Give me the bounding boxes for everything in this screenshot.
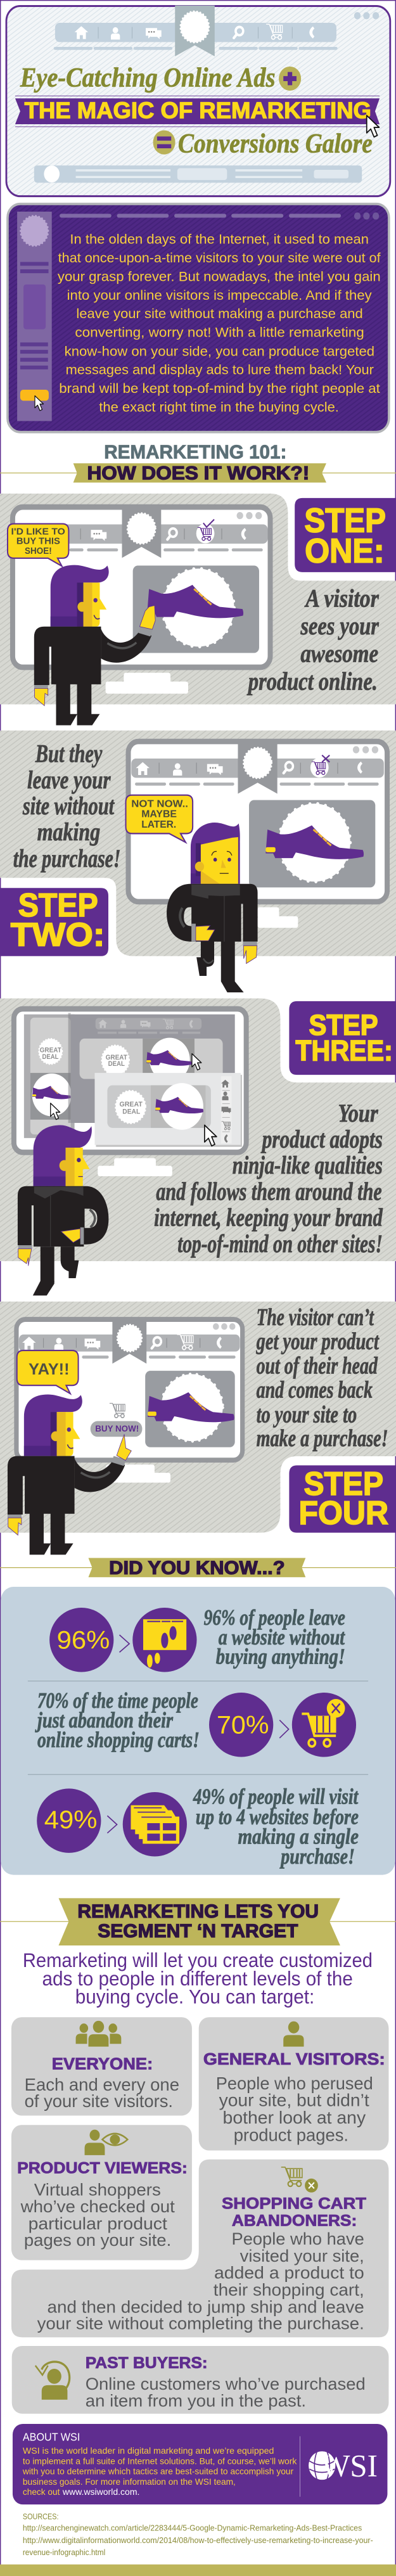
speech bubble: YAY!! [29, 1361, 70, 1378]
title line three: Conversions Galore [178, 129, 373, 159]
card: shopping cart abandoners: SHOPPING CART [222, 2195, 366, 2213]
segment intro text: Remarketing will let you create customized [23, 1950, 373, 1971]
intro text: leave your site without making a purchase and [76, 306, 363, 321]
product ad [145, 1371, 235, 1447]
panel: about WSI: check out [23, 2487, 60, 2497]
footer bar [34, 165, 362, 183]
character: visitor reaching for shoe [34, 565, 155, 725]
ad window: back left: GREAT [40, 1047, 61, 1054]
card: general visitors: GENERAL VISITORS: [203, 2050, 385, 2068]
product viewers text [17, 2160, 188, 2250]
navigation bar [55, 23, 336, 48]
stat: 70%: online shopping carts! [37, 1728, 200, 1752]
stat: 70%: 70% of the time people [37, 1689, 198, 1713]
stat: 49%: 49% [44, 1805, 97, 1834]
step one text: awesome [300, 640, 378, 668]
card: past buyers: Online customers who’ve purchased [86, 2374, 366, 2393]
segment and target banner: REMARKETING LETS YOU [77, 1901, 319, 1922]
plus icon [279, 67, 301, 91]
sources [23, 2511, 373, 2557]
header panel [6, 6, 390, 196]
stat: 49%: purchase! [279, 1845, 355, 1869]
monitor: step four [16, 1319, 243, 1483]
did you know banner: DID YOU KNOW...? [109, 1558, 285, 1579]
product ad [133, 566, 259, 653]
panel: about WSI: business goals. For more information on the WSI team, [23, 2477, 236, 2487]
monitor: step three [14, 1009, 246, 1176]
sources: http://www.digitalinformationworld.com/2014/08/how-to-effectively-use-remarketing-to-increase-your- [23, 2535, 373, 2545]
stat: 70%: just abandon their [35, 1708, 174, 1733]
equals icon [153, 131, 176, 155]
panel: statistics [1, 1587, 395, 1875]
stat: 96%: a website without [219, 1625, 346, 1650]
card: everyone: of your site visitors. [25, 2091, 173, 2111]
sources: SOURCES: [23, 2511, 58, 2522]
card: shopping cart abandoners: your site without completing the purchase. [37, 2314, 364, 2333]
segment and target banner: SEGMENT ‘N TARGET [98, 1921, 298, 1942]
intro text: know-how on your side, you can produce targeted [65, 344, 374, 359]
product viewers text: pages on your site. [24, 2230, 171, 2250]
stat: 96%: 96% of people leave [204, 1606, 345, 1630]
card: general visitors: product pages. [234, 2125, 348, 2145]
cursor [367, 115, 379, 137]
section 5: stats and targeting [0, 1774, 396, 2260]
ad window: front: DEAL [122, 1108, 141, 1115]
ad window: back left: DEAL [42, 1054, 59, 1061]
ad window: front [94, 1073, 242, 1147]
card: general visitors: your site, but didn’t [219, 2091, 369, 2110]
panel: about WSI: to implement a full suite of Internet solutions. But, of course, we’ll work [23, 2456, 297, 2466]
stat: 96%: 96% [57, 1626, 110, 1655]
step one text [246, 585, 380, 696]
product viewers text: PRODUCT VIEWERS: [17, 2160, 188, 2177]
stat: 96%: buying anything! [216, 1644, 345, 1669]
ad window: front: GREAT [120, 1101, 143, 1108]
section 4: step four and did you know [0, 1302, 396, 1875]
step three badge: THREE: [295, 1035, 393, 1067]
panel: step two [0, 731, 396, 956]
section 2: how it works [0, 442, 396, 992]
segment intro text: buying cycle. You can target: [75, 1986, 314, 2008]
speech bubble [126, 795, 193, 842]
step two text [13, 740, 121, 873]
card: shopping cart abandoners: their shopping cart, [214, 2280, 364, 2300]
panel: about WSI: WSI is the world leader in digital marketing and we’re equipped [23, 2446, 274, 2456]
title banner: THE MAGIC OF REMARKETING [25, 98, 371, 124]
speech bubble: NOT NOW.. [131, 798, 188, 809]
intro text: In the olden days of the Internet, it used to mean [70, 232, 369, 247]
step four badge: STEP [304, 1465, 383, 1502]
intro text: into your online visitors is impeccable. And if they [67, 288, 372, 303]
speech bubble [8, 524, 68, 566]
intro text: that once-upon-a-time visitors to your site were out of [58, 250, 381, 266]
heading: REMARKETING 101: [104, 442, 286, 463]
step two badge: STEP [18, 887, 98, 923]
step three text: Your [338, 1099, 379, 1127]
stat: 49%: up to 4 websites before [196, 1805, 359, 1829]
card: past buyers: PAST BUYERS: [86, 2355, 208, 2372]
product viewers text: who’ve checked out [20, 2196, 176, 2216]
section 3: step three [0, 999, 396, 1295]
speech bubble [17, 1350, 79, 1394]
product viewers text: Virtual shoppers [34, 2180, 161, 2200]
step two text: leave your [27, 766, 111, 794]
panel: step three [0, 999, 396, 1261]
stat: 70% [35, 1689, 356, 1757]
stat: 49% [37, 1785, 359, 1869]
step four badge: FOUR [299, 1494, 388, 1532]
panel: about WSI: www.wsiworld.com. [62, 2487, 139, 2497]
buy now button: BUY NOW! [95, 1424, 139, 1433]
title line one: Eye-Catching Online Ads [20, 63, 275, 93]
speech bubble: SHOE! [25, 546, 52, 556]
card: shopping cart abandoners: added a product to [214, 2263, 364, 2283]
ad window: middle [68, 1013, 235, 1123]
product viewers text: particular product [29, 2214, 168, 2233]
step one badge: STEP [304, 502, 386, 540]
card: shopping cart abandoners: and then decided to jump ship and leave [48, 2297, 364, 2317]
card: everyone: Each and every one [25, 2075, 179, 2094]
stat: 96% [49, 1606, 346, 1672]
intro text: your grasp forever. But nowadays, the intel you gain [58, 269, 381, 285]
character: visitor browsing [18, 1125, 108, 1295]
intro text: the exact right time in the buying cycle. [99, 400, 339, 415]
heading banner [0, 463, 396, 484]
step two badge [0, 887, 108, 956]
monitor: step two [128, 741, 387, 928]
speech bubble: I'D LIKE TO [11, 527, 65, 537]
segment intro text [23, 1950, 373, 2008]
speech bubble: BUY THIS [16, 536, 60, 546]
monitor: step one [13, 507, 271, 694]
intro panel [8, 204, 389, 432]
card: product viewers [11, 2125, 192, 2260]
step two text: site without [22, 793, 115, 820]
character: visitor clicking buy now [8, 1394, 131, 1554]
buy now button [91, 1403, 142, 1437]
did you know banner [0, 1558, 396, 1579]
section 6: targeting and about [0, 2160, 396, 2576]
ad window: middle: GREAT [106, 1054, 128, 1061]
step three badge: STEP [309, 1009, 378, 1042]
card: general visitors [199, 2017, 388, 2151]
character: visitor walking away [167, 823, 258, 992]
card: shopping cart abandoners [11, 2160, 388, 2337]
step three badge [289, 1001, 396, 1075]
sidebar [17, 212, 52, 421]
step four badge [289, 1465, 396, 1533]
card: general visitors: People who perused [216, 2073, 373, 2093]
card: shopping cart abandoners: visited your site, [240, 2246, 364, 2265]
intro text: messages and display ads to lure them back! Your [66, 362, 374, 378]
card: past buyers [12, 2346, 388, 2414]
segment intro text: ads to people in different levels of the [42, 1968, 353, 1990]
step three text [154, 1099, 383, 1258]
step two text: making [37, 819, 100, 847]
card: general visitors: bother look at any [223, 2108, 366, 2127]
ad window: middle: DEAL [108, 1060, 125, 1068]
WSI logo: WSI [321, 2448, 378, 2483]
intro text [58, 232, 381, 415]
panel: step one [0, 494, 396, 705]
panel: step four [0, 1302, 396, 1533]
panel: about WSI: ABOUT WSI [23, 2430, 80, 2444]
card: everyone [11, 2017, 192, 2115]
card: everyone: EVERYONE: [52, 2055, 153, 2073]
step one text: A visitor [305, 585, 380, 613]
step two badge: TWO: [11, 916, 105, 953]
speech bubble: LATER. [141, 819, 176, 830]
intro text: converting, worry not! With a little remarketing [75, 325, 364, 340]
step one badge [295, 498, 396, 572]
intro text: brand will be kept top-of-mind by the right people at [59, 381, 380, 396]
stat: 49%: making a single [238, 1824, 359, 1849]
step one text: sees your [300, 613, 380, 640]
card: shopping cart abandoners: People who have [232, 2229, 364, 2248]
step two text: the purchase! [13, 845, 121, 873]
footer band [0, 2565, 396, 2576]
panel: about WSI: with you to determine which tactics are best-suited to accomplish your [22, 2466, 294, 2477]
stat: 70%: 70% [217, 1711, 269, 1740]
ad window: back left [24, 1015, 75, 1138]
ribbon badge [175, 6, 215, 56]
step two text: But they [35, 740, 103, 768]
sources: http://searchenginewatch.com/article/2283444/5-Google-Dynamic-Remarketing-Ads-Best-Practices [23, 2523, 362, 2533]
heading banner: HOW DOES IT WORK?! [87, 463, 309, 484]
panel: about WSI [13, 2424, 387, 2504]
card: past buyers: an item from you in the past. [86, 2391, 306, 2411]
step four text: to your site to [257, 1400, 357, 1428]
sources: revenue-infographic.html [23, 2547, 105, 2557]
product ad [249, 800, 375, 887]
step four text [256, 1304, 388, 1451]
step one badge: ONE: [305, 532, 385, 570]
step one text: product online. [246, 668, 378, 696]
stat: 49%: 49% of people will visit [193, 1785, 359, 1809]
segment and target banner [0, 1898, 396, 1945]
card: shopping cart abandoners: ABANDONERS: [232, 2212, 357, 2230]
speech bubble: MAYBE [141, 809, 177, 820]
